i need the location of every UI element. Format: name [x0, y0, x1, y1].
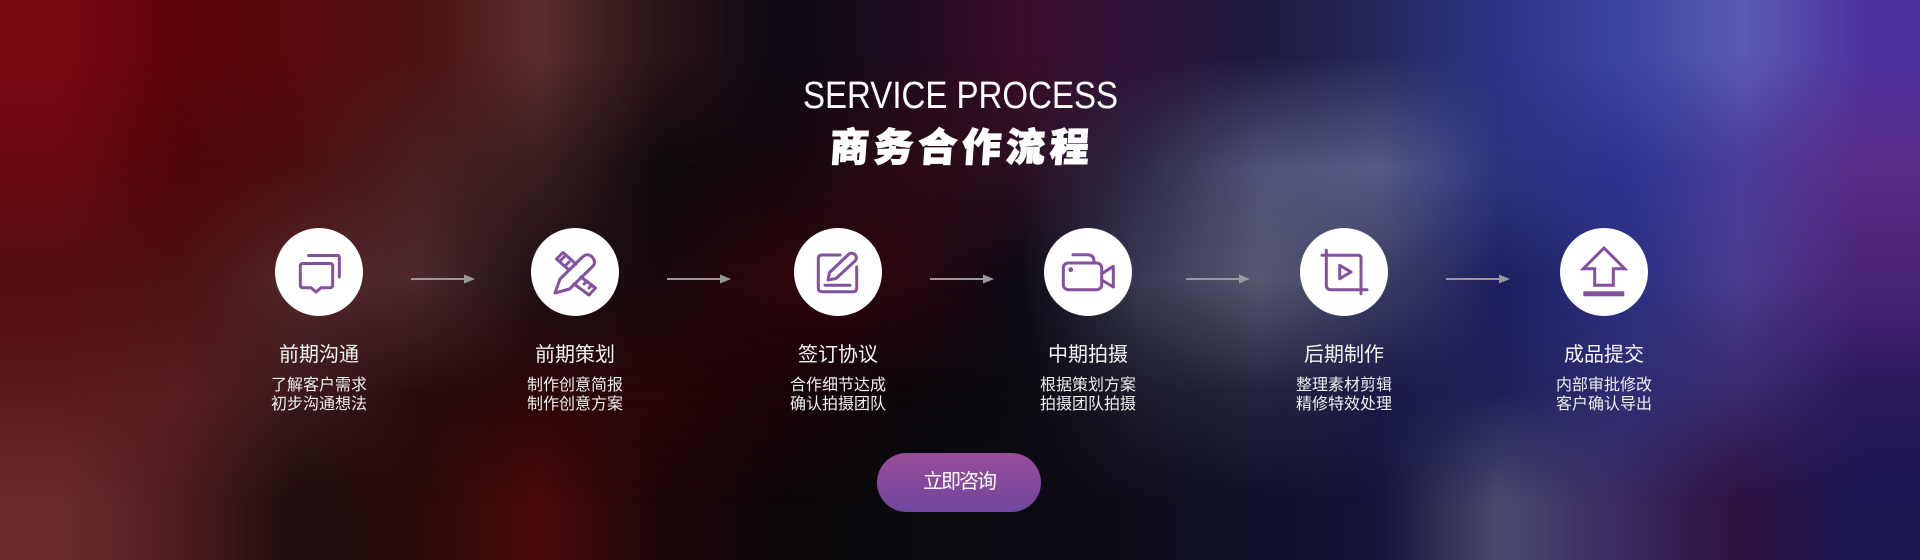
text: step description: 合作细节达成 [790, 377, 886, 394]
arrow 3 [930, 274, 994, 284]
text: step description: 精修特效处理 [1296, 396, 1392, 413]
step 5: 后期制作 [1296, 228, 1392, 413]
text: step description: 制作创意简报 [527, 377, 623, 394]
label: step title: 中期拍摄 [1048, 344, 1128, 366]
text: step description [527, 376, 623, 413]
text: step description: 整理素材剪辑 [1296, 377, 1392, 394]
arrow 4 [1186, 274, 1250, 284]
step 1: 前期沟通 [271, 228, 367, 413]
icon: video camera [1044, 228, 1132, 316]
heading: 商务合作流程: 商务合作流程 [829, 127, 1096, 170]
text: step description: 确认拍摄团队 [790, 396, 886, 413]
text: step description: 内部审批修改 [1556, 377, 1652, 394]
button: 立即咨询 [877, 453, 1041, 512]
text: step description [271, 376, 367, 413]
icon: crop with play [1300, 228, 1388, 316]
step 4: 中期拍摄 [1040, 228, 1136, 413]
text: step description [1556, 376, 1652, 413]
label: step title: 成品提交 [1564, 344, 1644, 366]
arrow 1 [411, 274, 475, 284]
text: step description: 根据策划方案 [1040, 377, 1136, 394]
text: step description: 拍摄团队拍摄 [1040, 396, 1136, 413]
label: step title: 前期沟通 [279, 344, 359, 366]
label: step title: 后期制作 [1304, 344, 1384, 366]
arrow 2 [667, 274, 731, 284]
label: step title: 前期策划 [535, 344, 615, 366]
icon: document with pencil [794, 228, 882, 316]
step 6: 成品提交 [1556, 228, 1652, 413]
text: step description [1040, 376, 1136, 413]
icon: upload arrow [1560, 228, 1648, 316]
text: step description: 制作创意方案 [527, 396, 623, 413]
text: step description [1296, 376, 1392, 413]
button: 立即咨询: 立即咨询 [923, 471, 995, 493]
label: step title: 签订协议 [798, 344, 878, 366]
arrow 5 [1446, 274, 1510, 284]
step 3: 签订协议 [790, 228, 886, 413]
text: step description: 初步沟通想法 [271, 396, 367, 413]
step 2: 前期策划 [527, 228, 623, 413]
text: step description: 了解客户需求 [271, 377, 367, 394]
text: step description [790, 376, 886, 413]
text: step description: 客户确认导出 [1556, 396, 1652, 413]
icon: pencil and ruler [531, 228, 619, 316]
icon: chat bubbles [275, 228, 363, 316]
